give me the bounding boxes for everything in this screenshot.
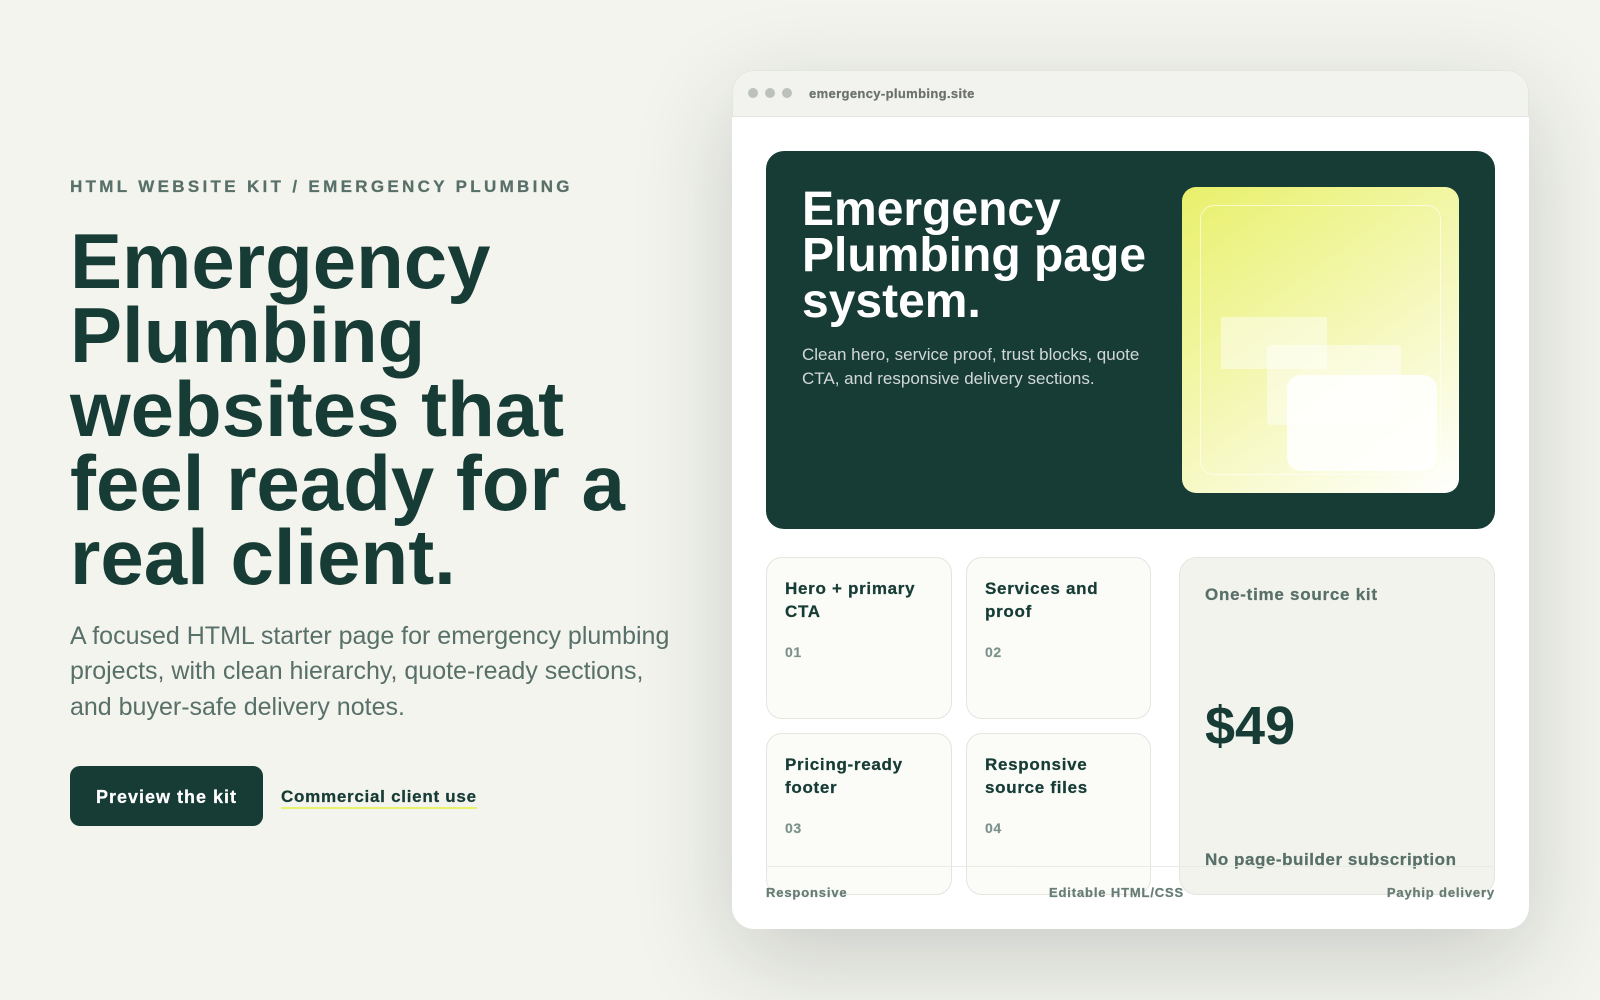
button: preview the kit: Preview the kit — [96, 787, 237, 807]
card number: 01 — [785, 644, 802, 660]
card number: 03 — [785, 820, 802, 836]
hero description — [802, 345, 1139, 388]
card title: proof — [985, 602, 1032, 621]
description: and buyer-safe delivery notes. — [70, 692, 405, 720]
card title — [785, 755, 903, 797]
price card — [1179, 557, 1495, 895]
price card note: No page-builder subscription — [1205, 850, 1457, 869]
window dots — [748, 88, 792, 98]
price: $49 — [1205, 696, 1295, 756]
outline frame — [1200, 205, 1441, 475]
hero visual — [1182, 187, 1459, 493]
main heading: Plumbing — [70, 291, 425, 379]
card title — [785, 579, 915, 621]
block two — [1267, 345, 1401, 425]
card title: Hero + primary — [785, 579, 915, 598]
card title: Pricing-ready — [785, 755, 903, 774]
left column: intro copy — [70, 177, 669, 826]
footer note: editable: Editable HTML/CSS — [1049, 885, 1184, 900]
main heading: feel ready for a — [70, 439, 625, 527]
description: A focused HTML starter page for emergency plumbing — [70, 622, 669, 650]
card title: CTA — [785, 602, 821, 621]
block three — [1287, 375, 1437, 471]
hero heading: Emergency — [802, 183, 1061, 236]
site address: emergency-plumbing.site — [809, 86, 975, 101]
description — [70, 622, 669, 720]
main heading — [70, 217, 626, 601]
main heading: websites that — [70, 365, 564, 453]
main heading: real client. — [70, 513, 456, 601]
hero description: Clean hero, service proof, trust blocks, quote — [802, 345, 1139, 364]
card title: Responsive — [985, 755, 1087, 774]
footer note: responsive: Responsive — [766, 885, 847, 900]
description: projects, with clean hierarchy, quote-ready sections, — [70, 657, 643, 685]
card title — [985, 579, 1098, 621]
browser address bar — [732, 70, 1529, 117]
card title: footer — [785, 778, 837, 797]
module card 02 — [966, 557, 1151, 719]
card title: source files — [985, 778, 1088, 797]
main heading: Emergency — [70, 217, 491, 305]
price card label: One-time source kit — [1205, 585, 1378, 604]
hero panel — [766, 151, 1495, 529]
hero description: CTA, and responsive delivery sections. — [802, 369, 1095, 388]
card number: 04 — [985, 820, 1002, 836]
card title: Services and — [985, 579, 1098, 598]
hero heading — [802, 183, 1146, 328]
eyebrow: HTML WEBSITE KIT / EMERGENCY PLUMBING — [70, 177, 573, 196]
hero heading: system. — [802, 275, 981, 328]
card title — [985, 755, 1088, 797]
footer strip — [766, 866, 1495, 906]
button: preview the kit — [70, 766, 263, 826]
hero heading: Plumbing page — [802, 229, 1146, 282]
browser mockup — [732, 70, 1529, 929]
module card 03 — [766, 733, 952, 895]
card number: 02 — [985, 644, 1002, 660]
module card 01 — [766, 557, 952, 719]
footer note: delivery: Payhip delivery — [1387, 885, 1495, 900]
block one — [1221, 317, 1327, 369]
module card 04 — [966, 733, 1151, 895]
link: commercial client use: Commercial client use — [281, 787, 477, 806]
